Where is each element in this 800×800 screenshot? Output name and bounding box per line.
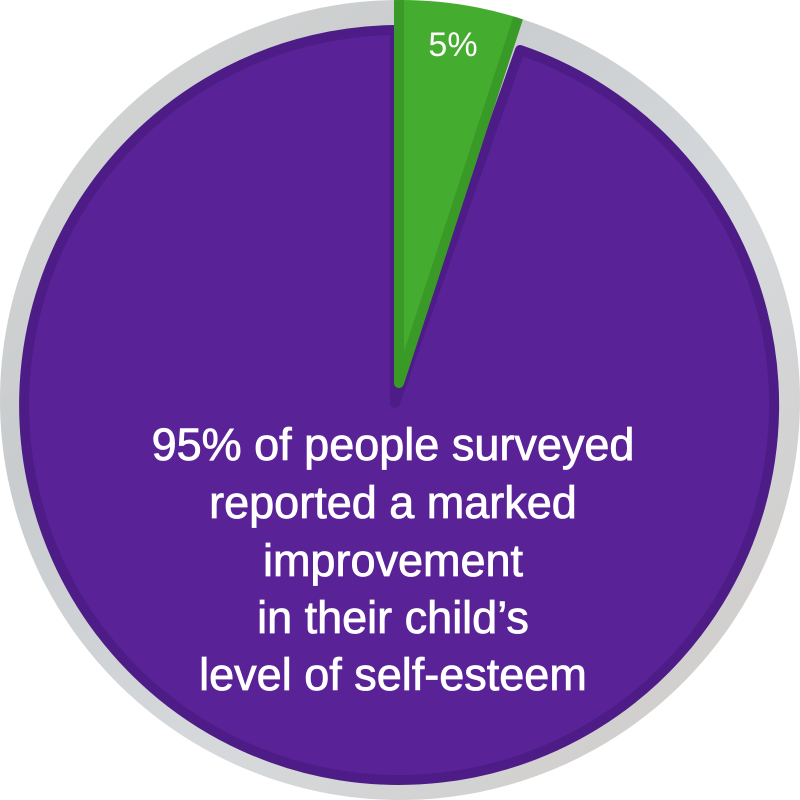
caption text: in their child’s [257, 592, 529, 643]
green slice 5% [399, 0, 524, 383]
caption text: level of self-esteem [199, 649, 587, 700]
caption text: reported a marked [209, 477, 577, 528]
caption text [152, 419, 634, 700]
label 5%: 5% [428, 26, 478, 64]
caption text: improvement [263, 535, 524, 586]
caption text: 95% of people surveyed [152, 419, 634, 470]
